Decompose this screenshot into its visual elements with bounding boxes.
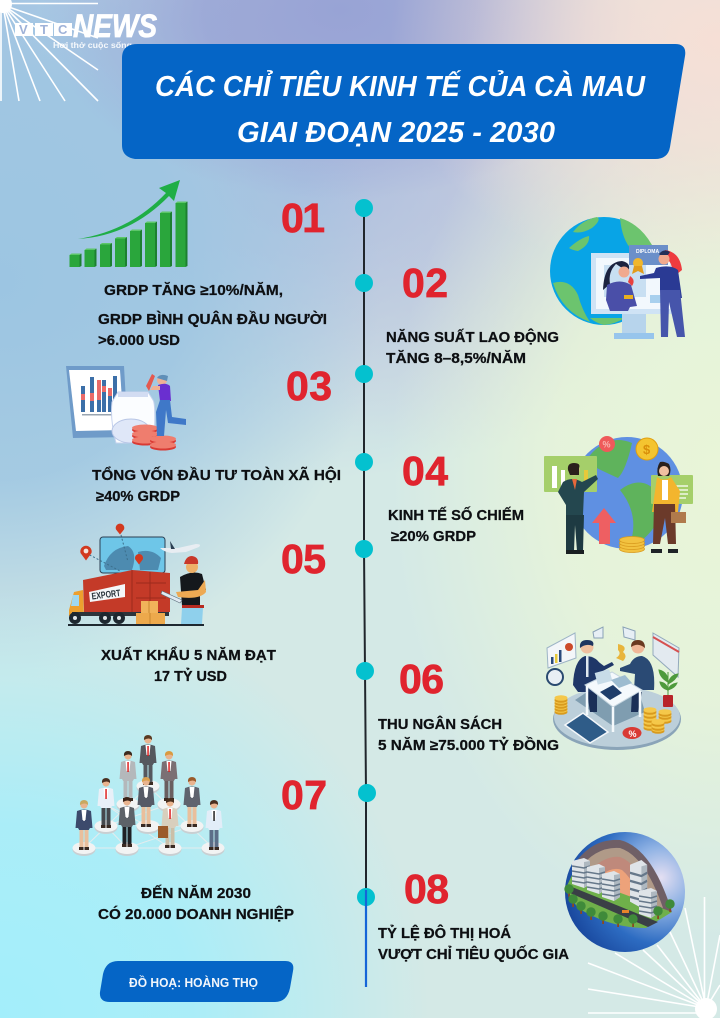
logo: VTC News: C [58, 22, 68, 37]
icon: digital economy globe with people: % [602, 440, 611, 450]
icon: rising green bar chart [70, 180, 188, 267]
credit badge [100, 961, 293, 1002]
text 04: ≥20% GRDP [391, 529, 476, 545]
icon: budget meeting: % [628, 729, 637, 739]
text 06: THU NGÂN SÁCH [378, 715, 502, 733]
text 05 [101, 646, 276, 685]
text 07: CÓ 20.000 DOANH NGHIỆP [98, 905, 294, 923]
number 01: 01 [281, 195, 325, 241]
text 01: >6.000 USD [98, 333, 180, 349]
number 08: 08 [404, 866, 449, 912]
text 02: TĂNG 8–8,5%/NĂM [386, 350, 526, 367]
number 07: 07 [281, 772, 327, 818]
number 06: 06 [399, 656, 444, 702]
icon: budget meeting [547, 627, 681, 750]
icon: digital economy globe with people [544, 436, 693, 554]
text 06 [378, 715, 559, 754]
text 01 [98, 282, 327, 349]
logo: VTC News: Hơi thở cuộc sống [53, 40, 132, 50]
item 08 [378, 832, 685, 963]
title banner [122, 44, 685, 159]
text 07: ĐẾN NĂM 2030 [141, 885, 251, 902]
item 04 [388, 436, 693, 554]
title text line 2: GIAI ĐOẠN 2025 - 2030 [237, 117, 555, 149]
text 02: NĂNG SUẤT LAO ĐỘNG [386, 328, 559, 346]
text 05: XUẤT KHẨU 5 NĂM ĐẠT [101, 646, 276, 664]
text 07 [98, 885, 294, 923]
icon: export truck [68, 524, 206, 626]
number 04: 04 [402, 448, 448, 494]
icon: business people network [72, 735, 224, 856]
text 04: KINH TẾ SỐ CHIẾM [388, 506, 524, 524]
title text line 1: CÁC CHỈ TIÊU KINH TẾ CỦA CÀ MAU [155, 68, 646, 103]
logo: VTC News: V [19, 22, 28, 37]
logo: VTC News: T [40, 22, 48, 37]
text 01: GRDP BÌNH QUÂN ĐẦU NGƯỜI [98, 310, 327, 328]
item 07 [72, 735, 327, 923]
item 02 [386, 217, 685, 367]
icon: globe and diploma: DIPLOMA [636, 249, 659, 255]
icon: investment board, jar and coins [66, 366, 186, 450]
text 08: VƯỢT CHỈ TIÊU QUỐC GIA [378, 945, 570, 963]
text 08: TỶ LỆ ĐÔ THỊ HOÁ [378, 924, 512, 942]
text 02 [386, 328, 559, 367]
logo: VTC News: NEWS [73, 8, 158, 44]
text 03: ≥40% GRDP [96, 489, 180, 505]
item 05 [68, 524, 326, 685]
number 02: 02 [402, 260, 448, 306]
icon: urban globe [564, 832, 685, 952]
icon: export truck: EXPORT [91, 588, 121, 602]
text 04 [388, 506, 524, 545]
item 03 [66, 363, 341, 505]
number 03: 03 [286, 363, 332, 409]
text 08 [378, 924, 570, 963]
text 03: TỔNG VỐN ĐẦU TƯ TOÀN XÃ HỘI [92, 466, 341, 484]
text 06: 5 NĂM ≥75.000 TỶ ĐỒNG [378, 736, 559, 754]
text 01: GRDP TĂNG ≥10%/NĂM, [104, 282, 283, 299]
item 01 [70, 180, 327, 349]
logo: VTC News [15, 8, 158, 50]
text 03 [92, 466, 341, 505]
sunburst bottom right [588, 897, 720, 1018]
credit badge: ĐỒ HOẠ: HOÀNG THỌ [129, 975, 258, 990]
item 06 [378, 627, 681, 754]
text 05: 17 TỶ USD [154, 668, 227, 685]
number 05: 05 [281, 536, 326, 582]
pin left [80, 546, 92, 560]
timeline [355, 199, 376, 987]
icon: digital economy globe with people: $ [643, 442, 651, 457]
sunburst top left [0, 0, 98, 101]
icon: globe and diploma [550, 217, 685, 339]
